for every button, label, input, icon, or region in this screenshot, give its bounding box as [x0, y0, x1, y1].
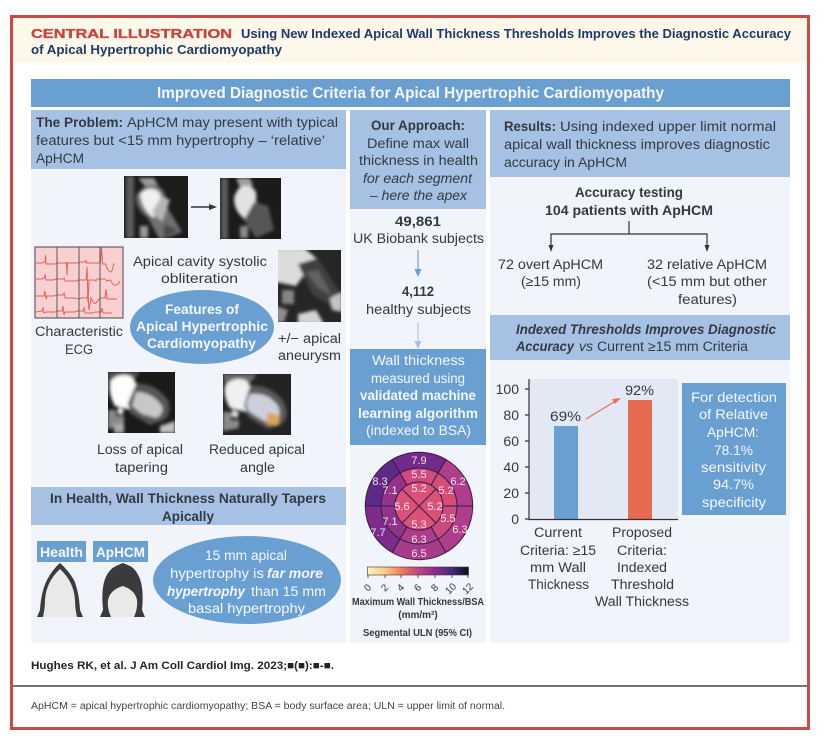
approach heading: – here the apex [369, 188, 468, 203]
image: ECG [35, 247, 123, 318]
main banner [31, 79, 790, 107]
bar chart: diagnostic accuracy [496, 379, 689, 609]
legend: colour scale: 4 [395, 582, 407, 594]
heading: wall thickness tapers: In Health, Wall Thickness Naturally Tapers [50, 491, 326, 506]
image: reduced apical angle MRI [223, 374, 291, 435]
label: loss of apical tapering [97, 442, 183, 475]
heading: indexed thresholds [490, 315, 790, 360]
ellipse: features of ApHCM [130, 290, 274, 364]
ellipse: features of ApHCM: Cardiomyopathy [147, 336, 256, 351]
arrow: cohort to healthy [414, 250, 422, 277]
chart: bullseye plot: 7.7 [370, 527, 386, 539]
chart: bullseye plot: 5.2 [411, 483, 427, 495]
label: apical cavity systolic obliteration [133, 254, 267, 286]
arrow: healthy to measurement [414, 322, 422, 349]
label: reduced apical angle: angle [240, 460, 275, 475]
bar chart: diagnostic accuracy: 92% [625, 382, 654, 398]
accuracy testing heading: Accuracy testing [575, 185, 683, 200]
chart: bullseye plot: 7.1 [382, 485, 398, 497]
results heading [490, 110, 790, 177]
ellipse: 15 mm apical hypertrophy: than 15 mm [251, 584, 326, 599]
approach heading: for each segment [363, 171, 473, 186]
approach heading: Our Approach: [371, 118, 465, 133]
approach heading [350, 110, 486, 209]
legend: colour scale: Segmental ULN (95% CI) [363, 628, 472, 639]
legend: colour scale: 12 [460, 581, 476, 597]
citation: Hughes RK, et al. J Am Coll Cardiol Img. 2023;■(■):■-■. [31, 660, 334, 672]
legend: colour scale: (mm/m²) [398, 610, 438, 621]
heading: indexed thresholds: Accuracy [515, 339, 575, 354]
box: sensitivity and specificity: sensitivity [701, 460, 766, 475]
results heading: Results: [504, 119, 556, 134]
approach heading: thickness in health [359, 153, 478, 168]
footnote: ApHCM = apical hypertrophic cardiomyopathy; BSA = body surface area; ULN = upper limit of normal. [31, 701, 505, 712]
ellipse: features of ApHCM: Apical Hypertrophic [136, 319, 269, 334]
stat: 49,861 UK Biobank subjects [353, 214, 484, 246]
stat: 4,112 healthy subjects: 4,112 [402, 284, 434, 299]
image: cardiac MRI systole [220, 178, 281, 239]
problem heading: features but <15 mm hypertrophy – ‘relative’ [36, 133, 325, 148]
results heading: accuracy in ApHCM [504, 155, 627, 170]
bar chart: diagnostic accuracy: 100 [496, 381, 519, 397]
panel: results [490, 110, 790, 643]
legend: colour scale [352, 567, 484, 639]
label: loss of apical tapering: Loss of apical [97, 442, 183, 457]
icon: ApHCM ventricle [100, 563, 145, 617]
bar chart: diagnostic accuracy: 80 [503, 407, 519, 423]
heading: indexed thresholds: vs Current ≥15 mm Criteria [579, 339, 749, 354]
box: wall thickness measurement: learning algorithm [358, 406, 478, 421]
tag: health: Health [40, 545, 83, 560]
bar chart: diagnostic accuracy: 0 [511, 511, 519, 527]
problem heading: ApHCM may present with typical [127, 115, 338, 130]
panel: our approach [350, 110, 486, 643]
chart: bullseye plot: 5.5 [411, 469, 427, 481]
bar chart: diagnostic accuracy: 60 [503, 433, 519, 449]
bar chart: diagnostic accuracy: 20 [503, 485, 519, 501]
bar chart: diagnostic accuracy: 40 [503, 459, 519, 475]
stat: 49,861 UK Biobank subjects: UK Biobank subjects [353, 231, 484, 246]
label: apical cavity systolic obliteration: Apical cavity systolic [133, 254, 267, 269]
heading: indexed thresholds: Indexed Thresholds Improves Diagnostic [516, 322, 776, 337]
ellipse: 15 mm apical hypertrophy: hypertrophy is [170, 566, 264, 581]
accuracy testing heading: 104 patients with ApHCM [545, 203, 713, 218]
box: sensitivity and specificity: 78.1% [714, 443, 753, 458]
label: characteristic ECG: Characteristic [35, 324, 123, 339]
label: apical aneurysm: +/− apical [278, 331, 341, 346]
tag: ApHCM: ApHCM [96, 545, 145, 560]
legend: colour scale: Maximum Wall Thickness/BSA [352, 597, 484, 608]
arrow: systole sequence [191, 204, 217, 210]
chart: bullseye plot: 5.6 [394, 501, 410, 513]
legend: colour scale: 2 [379, 582, 391, 594]
box: sensitivity and specificity: 94.7% [713, 477, 754, 492]
box: wall thickness measurement: measured using [371, 371, 465, 386]
label: apical aneurysm [278, 331, 341, 363]
group: relative ApHCM: (<15 mm but other [647, 274, 768, 289]
icon: healthy ventricle [37, 563, 83, 617]
bar chart: diagnostic accuracy: 69% [550, 408, 581, 424]
heading: wall thickness tapers: Apically [162, 509, 214, 524]
arrow: improvement [586, 398, 621, 419]
chart: bullseye plot: 6.5 [411, 548, 427, 560]
group: relative ApHCM: 32 relative ApHCM [647, 257, 767, 272]
ellipse: features of ApHCM: Features of [165, 302, 239, 317]
group: relative ApHCM [647, 257, 768, 307]
legend: colour scale: 6 [412, 582, 424, 594]
panel: the problem [31, 110, 346, 643]
box: wall thickness measurement [350, 349, 486, 445]
bar chart: diagnostic accuracy: Proposed [612, 525, 672, 540]
box: wall thickness measurement: validated machine [360, 388, 476, 403]
tag: health [37, 541, 86, 562]
bar chart: diagnostic accuracy: Thickness [528, 577, 589, 592]
ellipse: 15 mm apical hypertrophy [153, 536, 341, 624]
chart: bullseye plot: 6.2 [450, 476, 466, 488]
label: characteristic ECG: ECG [65, 342, 93, 357]
heading: wall thickness tapers [31, 487, 346, 525]
chart: bullseye plot [365, 452, 473, 560]
bar chart: diagnostic accuracy: Criteria: [617, 543, 667, 558]
ellipse: 15 mm apical hypertrophy: far more [267, 566, 323, 581]
box: sensitivity and specificity [682, 383, 786, 515]
approach heading: Define max wall [367, 136, 469, 151]
box: wall thickness measurement: (indexed to BSA) [366, 423, 471, 438]
results heading: Using indexed upper limit normal [560, 119, 776, 134]
chart: bullseye plot: 5.2 [438, 485, 454, 497]
label: characteristic ECG [35, 324, 123, 357]
chart: bullseye plot: 7.1 [382, 516, 398, 528]
group: overt ApHCM: (≥15 mm) [521, 274, 581, 289]
group: overt ApHCM: 72 overt ApHCM [498, 257, 603, 272]
label: apical cavity systolic obliteration: obliteration [161, 271, 238, 286]
label: reduced apical angle [209, 442, 305, 475]
bar chart: diagnostic accuracy: Threshold [611, 577, 674, 592]
stat: 49,861 UK Biobank subjects: 49,861 [395, 214, 442, 229]
legend: colour scale: 0 [362, 582, 374, 594]
legend: colour scale: 8 [429, 582, 441, 594]
bar chart: diagnostic accuracy: mm Wall [530, 560, 586, 575]
chart: bullseye plot: 6.3 [452, 524, 468, 536]
problem heading: ApHCM [36, 151, 84, 166]
main banner: Improved Diagnostic Criteria for Apical Hypertrophic Cardiomyopathy [157, 85, 664, 102]
bar chart: diagnostic accuracy: Criteria: ≥15 [520, 543, 596, 558]
results heading: apical wall thickness improves diagnostic [504, 137, 770, 152]
image: cardiac MRI diastole [124, 176, 188, 240]
ellipse: 15 mm apical hypertrophy: hypertrophy [167, 584, 246, 599]
image: apical aneurysm MRI [278, 250, 341, 322]
header band [12, 18, 809, 63]
box: sensitivity and specificity: specificity [702, 495, 766, 510]
title [31, 26, 791, 57]
ellipse: 15 mm apical hypertrophy: basal hypertrophy [188, 601, 305, 616]
problem heading: The Problem: [36, 115, 123, 130]
problem heading [31, 110, 346, 169]
ellipse: 15 mm apical hypertrophy: 15 mm apical [205, 548, 287, 563]
box: sensitivity and specificity: of Relative [699, 407, 768, 422]
bar chart: diagnostic accuracy: Wall Thickness [595, 594, 689, 609]
stat: 4,112 healthy subjects: healthy subjects [366, 302, 471, 317]
box: sensitivity and specificity: ApHCM: [707, 425, 759, 440]
title: Using New Indexed Apical Wall Thickness Thresholds Improves the Diagnostic Accuracy [241, 27, 791, 41]
legend: colour scale: 10 [443, 581, 459, 597]
title: CENTRAL ILLUSTRATION [31, 26, 232, 41]
title: of Apical Hypertrophic Cardiomyopathy [31, 43, 282, 57]
bar chart: diagnostic accuracy: Indexed [617, 560, 667, 575]
chart: bullseye plot: 7.9 [411, 455, 427, 467]
stat: 4,112 healthy subjects [366, 284, 471, 317]
bar: proposed criteria [628, 400, 652, 519]
label: apical aneurysm: aneurysm [278, 348, 341, 363]
group: relative ApHCM: features) [678, 292, 737, 307]
chart: bullseye plot: 5.3 [411, 519, 427, 531]
chart: bullseye plot: 5.2 [427, 501, 443, 513]
label: loss of apical tapering: tapering [115, 460, 168, 475]
bar chart: diagnostic accuracy: Current [534, 525, 582, 540]
box: sensitivity and specificity: For detection [691, 390, 777, 405]
bar: current criteria [554, 426, 578, 519]
group: overt ApHCM [498, 257, 603, 289]
arrow: patient split tree [548, 221, 710, 252]
accuracy testing heading [545, 185, 713, 218]
tag: ApHCM [93, 541, 148, 562]
image: loss of apical tapering MRI [108, 372, 175, 433]
chart: bullseye plot: 6.3 [411, 534, 427, 546]
box: wall thickness measurement: Wall thickness [372, 353, 465, 368]
label: reduced apical angle: Reduced apical [209, 442, 305, 457]
chart: bullseye plot: 5.5 [440, 513, 456, 525]
chart: bullseye plot: 8.3 [372, 476, 388, 488]
